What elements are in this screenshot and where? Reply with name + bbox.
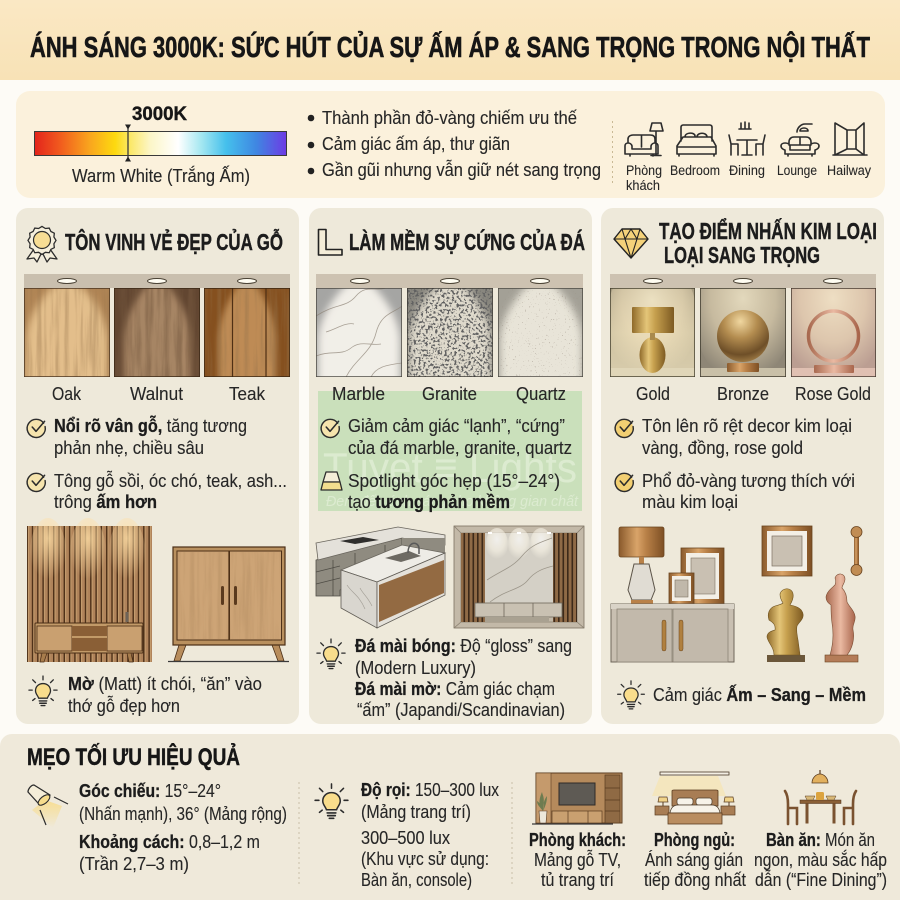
illuminance: (Khu vực sử dụng: — [361, 848, 489, 869]
spectrum scale: 3000K — [132, 103, 187, 125]
benefit: narrow spotlight: Spotlight góc hẹp (15°–24°) — [348, 470, 560, 491]
bronze swatch — [700, 288, 786, 377]
heading: LÀM MỀM SỰ CỨNG CỦA ĐÁ — [349, 227, 585, 255]
icon: hallway door — [833, 123, 867, 155]
watermark: Tuyet ≡ Lights — [323, 444, 577, 491]
application: living room — [532, 773, 622, 824]
benefit: warmer tones — [27, 470, 287, 512]
room labels: Đining — [729, 163, 765, 178]
metal samples: Gold — [636, 383, 670, 404]
beam angle and distance: Góc chiếu: 15°–24° — [79, 780, 221, 801]
room labels: Phòng — [626, 163, 662, 178]
room labels: Lounge — [777, 163, 817, 178]
stone samples: Marble — [332, 383, 385, 404]
benefit: softer stone: Giảm cảm giác “lạnh”, “cứng” — [348, 415, 565, 436]
illuminance: (Mảng trang trí) — [361, 801, 471, 822]
metal samples — [607, 253, 881, 404]
application captions: Mảng gỗ TV, — [534, 849, 621, 870]
room labels: khách — [626, 178, 660, 193]
bullet list: Thành phần đỏ-vàng chiếm ưu thế — [322, 107, 578, 128]
benefit: softer stone — [321, 415, 572, 458]
panel: color temperature overview — [16, 91, 885, 198]
benefit: narrow spotlight: tạo tương phản mềm — [348, 491, 510, 512]
room labels — [626, 163, 871, 193]
watermark: Đem đến ánh sáng cho không gian chất — [326, 493, 579, 510]
icon: medal — [27, 226, 57, 262]
tip: warm luxury soft: Cảm giác Ấm – Sang – Mềm — [653, 684, 866, 705]
illustration: lamp, frames and cabinet — [611, 527, 734, 662]
icon: L profile — [318, 230, 342, 255]
quartz swatch — [498, 288, 583, 377]
panel: optimization tips — [0, 734, 900, 900]
benefit: softer stone: của đá marble, granite, quartz — [348, 437, 572, 458]
panel: stone — [309, 208, 592, 724]
illuminance: Bàn ăn, console) — [361, 869, 472, 890]
wood samples: Oak — [52, 383, 82, 404]
room labels: Bedroom — [670, 163, 720, 178]
illustration: door handle — [851, 526, 862, 576]
application captions: Bàn ăn: Món ăn — [766, 829, 875, 850]
tip: polished vs honed stone: Đá mài mờ: Cảm giác chạm — [355, 678, 555, 699]
heading: MẸO TỐI ƯU HIỆU QUẢ — [27, 742, 240, 771]
icon: diamond — [614, 229, 648, 258]
illustration: wall frame — [762, 526, 812, 576]
panel: metal — [601, 208, 884, 724]
beam angle and distance — [28, 780, 287, 874]
heading: LOẠI SANG TRỌNG — [664, 242, 820, 268]
icon: lounge — [781, 124, 819, 156]
benefit: wood grain: Nổi rõ vân gỗ, tăng tương — [54, 415, 247, 436]
illustration: marble feature wall — [454, 526, 584, 628]
application: bedroom — [652, 772, 735, 824]
benefit: spectrum match: màu kim loại — [642, 491, 738, 512]
application captions: Phòng khách: — [529, 829, 626, 850]
benefit: spectrum match: Phổ đỏ-vàng tương thích với — [642, 470, 855, 491]
oak swatch — [24, 288, 110, 377]
application captions — [529, 829, 887, 890]
illustration: gold bust — [767, 589, 805, 662]
illuminance: 300–500 lux — [361, 827, 451, 848]
gold swatch — [610, 288, 695, 377]
spectrum scale: Warm White (Trắng Ấm) — [72, 165, 250, 186]
marble swatch — [316, 288, 402, 377]
application captions: tiếp đồng nhất — [644, 869, 746, 890]
teak swatch — [204, 288, 290, 377]
application captions: Ánh sáng gián — [645, 849, 743, 870]
tip: polished vs honed stone: “ấm” (Japandi/Scandinavian) — [357, 699, 565, 720]
wood samples: Teak — [229, 383, 266, 404]
beam angle and distance: (Nhấn mạnh), 36° (Mảng rộng) — [79, 803, 287, 824]
tip: polished vs honed stone: (Modern Luxury) — [355, 657, 476, 678]
stone samples: Quartz — [516, 383, 566, 404]
bullet list — [308, 107, 601, 180]
watermark — [318, 391, 582, 511]
illustration: kitchen island — [316, 527, 445, 628]
beam angle and distance: (Trần 2,7–3 m) — [79, 853, 189, 874]
room labels: Hailway — [827, 163, 871, 178]
heading: TÔN VINH VẺ ĐẸP CỦA GỖ — [65, 227, 283, 255]
tip: matt finish: thớ gỗ đẹp hơn — [68, 695, 180, 716]
granite swatch — [407, 288, 493, 377]
wood samples — [24, 274, 290, 404]
illustration: copper statue — [825, 574, 858, 662]
illuminance: Độ rọi: 150–300 lux — [361, 779, 500, 800]
rose gold swatch — [791, 288, 876, 377]
benefit: narrow spotlight — [321, 470, 560, 512]
bullet list: Cảm giác ấm áp, thư giãn — [322, 133, 510, 154]
metal samples: Bronze — [717, 383, 769, 404]
icon: living room sofa and lamp — [625, 123, 663, 156]
spectrum scale — [34, 103, 286, 186]
illustration: wood cabinet — [168, 547, 289, 662]
room type icons — [625, 122, 867, 156]
panel: wood — [16, 208, 299, 724]
tip: warm luxury soft — [618, 681, 866, 709]
stone samples — [316, 274, 583, 404]
benefit: wood grain: phản nhẹ, chiều sâu — [54, 437, 204, 458]
wood samples: Walnut — [130, 383, 183, 404]
metal samples: Rose Gold — [795, 383, 871, 404]
benefit: spectrum match — [615, 470, 855, 512]
benefit: metal decor: Tôn lên rõ rệt decor kim loại — [642, 415, 852, 436]
benefit: warmer tones: Tông gỗ sồi, óc chó, teak, ash... — [54, 470, 287, 491]
walnut swatch — [114, 288, 200, 377]
tip: matt finish — [29, 673, 262, 716]
icon: dining — [729, 122, 765, 155]
benefit: wood grain — [27, 415, 247, 458]
illustration: slat wall with console — [27, 518, 152, 662]
beam angle and distance: Khoảng cách: 0,8–1,2 m — [79, 831, 260, 852]
benefit: metal decor: vàng, đồng, rose gold — [642, 437, 803, 458]
tip: matt finish: Mờ (Matt) ít chói, “ăn” vào — [68, 673, 262, 694]
bullet list: Gần gũi nhưng vẫn giữ nét sang trọng — [322, 159, 601, 180]
illuminance — [315, 779, 500, 890]
application captions: Phòng ngủ: — [654, 829, 735, 850]
benefit: warmer tones: trông ấm hơn — [54, 491, 157, 512]
stone samples: Granite — [422, 383, 477, 404]
heading — [659, 217, 877, 268]
header band — [0, 0, 900, 80]
benefit: metal decor — [615, 415, 852, 458]
icon: bedroom — [677, 125, 716, 156]
tip: polished vs honed stone — [317, 635, 572, 720]
tip: polished vs honed stone: Đá mài bóng: Độ “gloss” sang — [355, 635, 572, 656]
application captions: tủ trang trí — [541, 869, 615, 890]
application: dining — [785, 770, 856, 824]
